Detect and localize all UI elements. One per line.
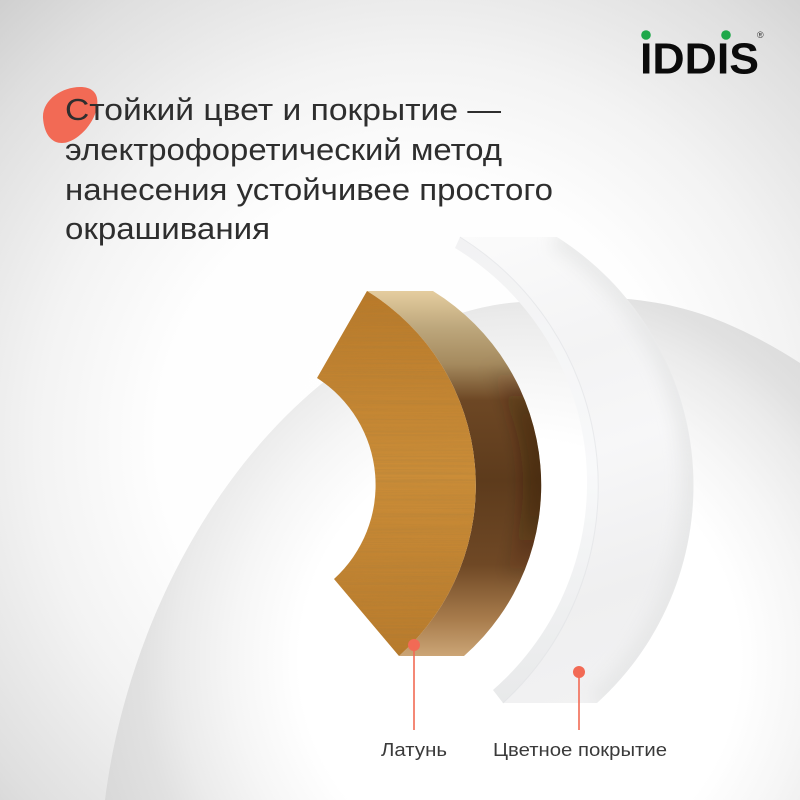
brass side band <box>497 370 542 570</box>
brushed texture <box>335 392 476 650</box>
title: электрофоретический метод <box>65 132 502 167</box>
coating edge line <box>460 237 598 703</box>
title: Стойкий цвет и покрытие — <box>65 92 501 127</box>
title: нанесения устойчивее простого <box>65 172 553 207</box>
large disc <box>105 298 800 800</box>
coating inner edge <box>455 237 598 703</box>
label: brass: Латунь <box>381 740 447 760</box>
accent blob <box>43 87 97 143</box>
brass side <box>367 291 541 656</box>
label: coating: Цветное покрытие <box>493 740 667 760</box>
brass piece <box>310 285 541 660</box>
brass face <box>317 291 476 656</box>
white coating piece <box>455 237 693 703</box>
logo: ® <box>757 30 764 40</box>
coating outer face <box>460 237 693 703</box>
coating marker <box>573 666 585 730</box>
logo: IDDIS <box>640 36 759 84</box>
title: окрашивания <box>65 211 270 246</box>
coating shading <box>557 237 693 703</box>
brass marker <box>408 639 420 730</box>
title <box>65 92 553 246</box>
